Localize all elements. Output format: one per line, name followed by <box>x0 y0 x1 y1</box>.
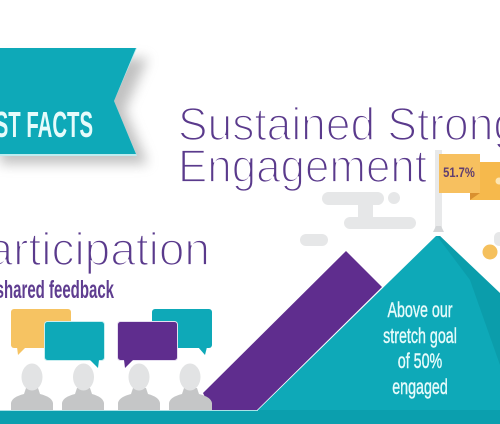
person 4 <box>169 364 212 411</box>
speech bubble: yellow <box>11 309 71 355</box>
person icons <box>11 364 212 411</box>
speech bubble: teal back <box>152 309 212 355</box>
flag value: 51.7% <box>443 165 475 180</box>
clouds <box>300 192 500 246</box>
banner: fast facts <box>0 48 148 164</box>
mountain caption <box>383 298 457 399</box>
heading: sustained strong engagement <box>178 98 500 192</box>
yellow dot <box>482 244 498 260</box>
person 1 <box>11 364 53 411</box>
mountain caption: Above our <box>387 298 453 322</box>
mountain caption: of 50% <box>398 349 442 373</box>
heading: sustained strong engagement: Engagement <box>178 140 427 192</box>
person 3 <box>118 364 160 411</box>
flag <box>433 150 500 232</box>
speech bubble: teal front <box>44 322 104 368</box>
mountain caption: engaged <box>392 375 448 399</box>
mountain: purple <box>203 251 382 411</box>
bottom bar <box>0 410 500 424</box>
person 2 <box>62 364 104 411</box>
mountain: teal <box>257 236 500 411</box>
mountain caption: stretch goal <box>383 324 457 348</box>
speech bubble: purple <box>118 322 178 368</box>
